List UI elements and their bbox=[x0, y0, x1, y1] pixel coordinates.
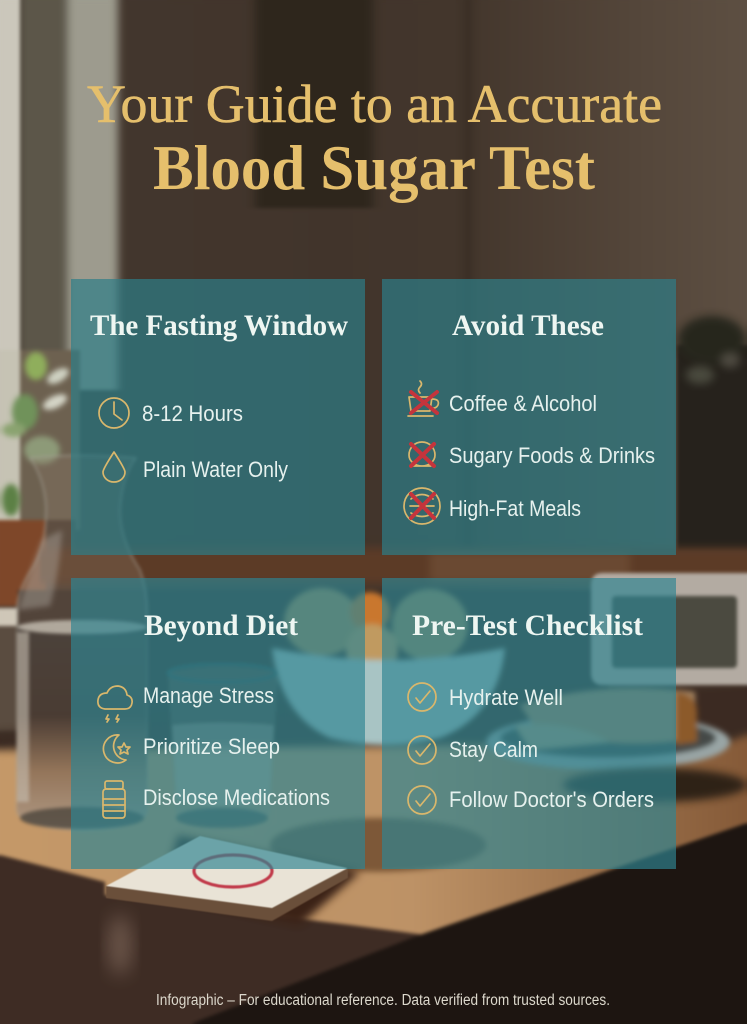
shelf band behind panels bbox=[40, 548, 747, 584]
text: 8-12 hours: 8-12 Hours bbox=[142, 401, 243, 426]
icon: clock bbox=[99, 398, 129, 428]
icon: storm cloud bbox=[98, 686, 132, 722]
text: sugary foods and drinks: Sugary Foods & Drinks bbox=[449, 443, 655, 468]
panel: pre-test checklist bbox=[382, 578, 676, 869]
plate and bread bbox=[486, 688, 730, 770]
icon: check circle 3 bbox=[408, 786, 436, 814]
icon: check circle 1 bbox=[408, 683, 436, 711]
title bbox=[87, 74, 662, 203]
panel: beyond diet bbox=[71, 578, 365, 869]
icon: medicine bottle bbox=[103, 781, 125, 818]
notebook shadow bbox=[160, 835, 360, 925]
icon: crossed coffee cup bbox=[408, 381, 438, 416]
heading: avoid these: Avoid These bbox=[452, 309, 604, 342]
text: manage stress: Manage Stress bbox=[143, 683, 274, 708]
glass carafe bbox=[17, 456, 147, 830]
panel: avoid these bbox=[382, 279, 676, 555]
table bbox=[0, 688, 747, 1024]
title: Blood Sugar Test bbox=[153, 132, 596, 203]
panel: the fasting window bbox=[71, 279, 365, 555]
text: disclose medications: Disclose Medications bbox=[143, 785, 330, 810]
text: stay calm: Stay Calm bbox=[449, 737, 538, 762]
notepad with red circle bbox=[106, 836, 348, 921]
icon: water drop bbox=[103, 452, 125, 482]
icon: crossed sugary food bbox=[409, 442, 435, 466]
distant plant on right bbox=[650, 316, 747, 580]
footer note: Infographic – For educational reference. Data verified from trusted sources. bbox=[156, 992, 610, 1009]
icon: moon and star bbox=[103, 735, 130, 763]
heading: the fasting window: The Fasting Window bbox=[90, 309, 348, 342]
icon: crossed high-fat meal bbox=[404, 488, 440, 524]
plant and pot on left bbox=[0, 350, 80, 731]
text: hydrate well: Hydrate Well bbox=[449, 685, 563, 710]
heading: beyond diet: Beyond Diet bbox=[144, 609, 298, 642]
heading: pre-test checklist: Pre-Test Checklist bbox=[412, 609, 643, 642]
icon: check circle 2 bbox=[408, 736, 436, 764]
text: prioritize sleep: Prioritize Sleep bbox=[143, 734, 280, 759]
alarm clock bbox=[591, 573, 747, 685]
text: plain water only: Plain Water Only bbox=[143, 457, 289, 482]
text: high-fat meals: High-Fat Meals bbox=[449, 496, 581, 521]
title: Your Guide to an Accurate bbox=[87, 74, 662, 134]
plate shadow bbox=[563, 768, 747, 802]
glass of water bbox=[168, 664, 278, 828]
text: coffee and alcohol: Coffee & Alcohol bbox=[449, 391, 597, 416]
text: follow doctor's orders: Follow Doctor's Orders bbox=[449, 787, 654, 812]
fruit bowl bbox=[272, 588, 505, 745]
